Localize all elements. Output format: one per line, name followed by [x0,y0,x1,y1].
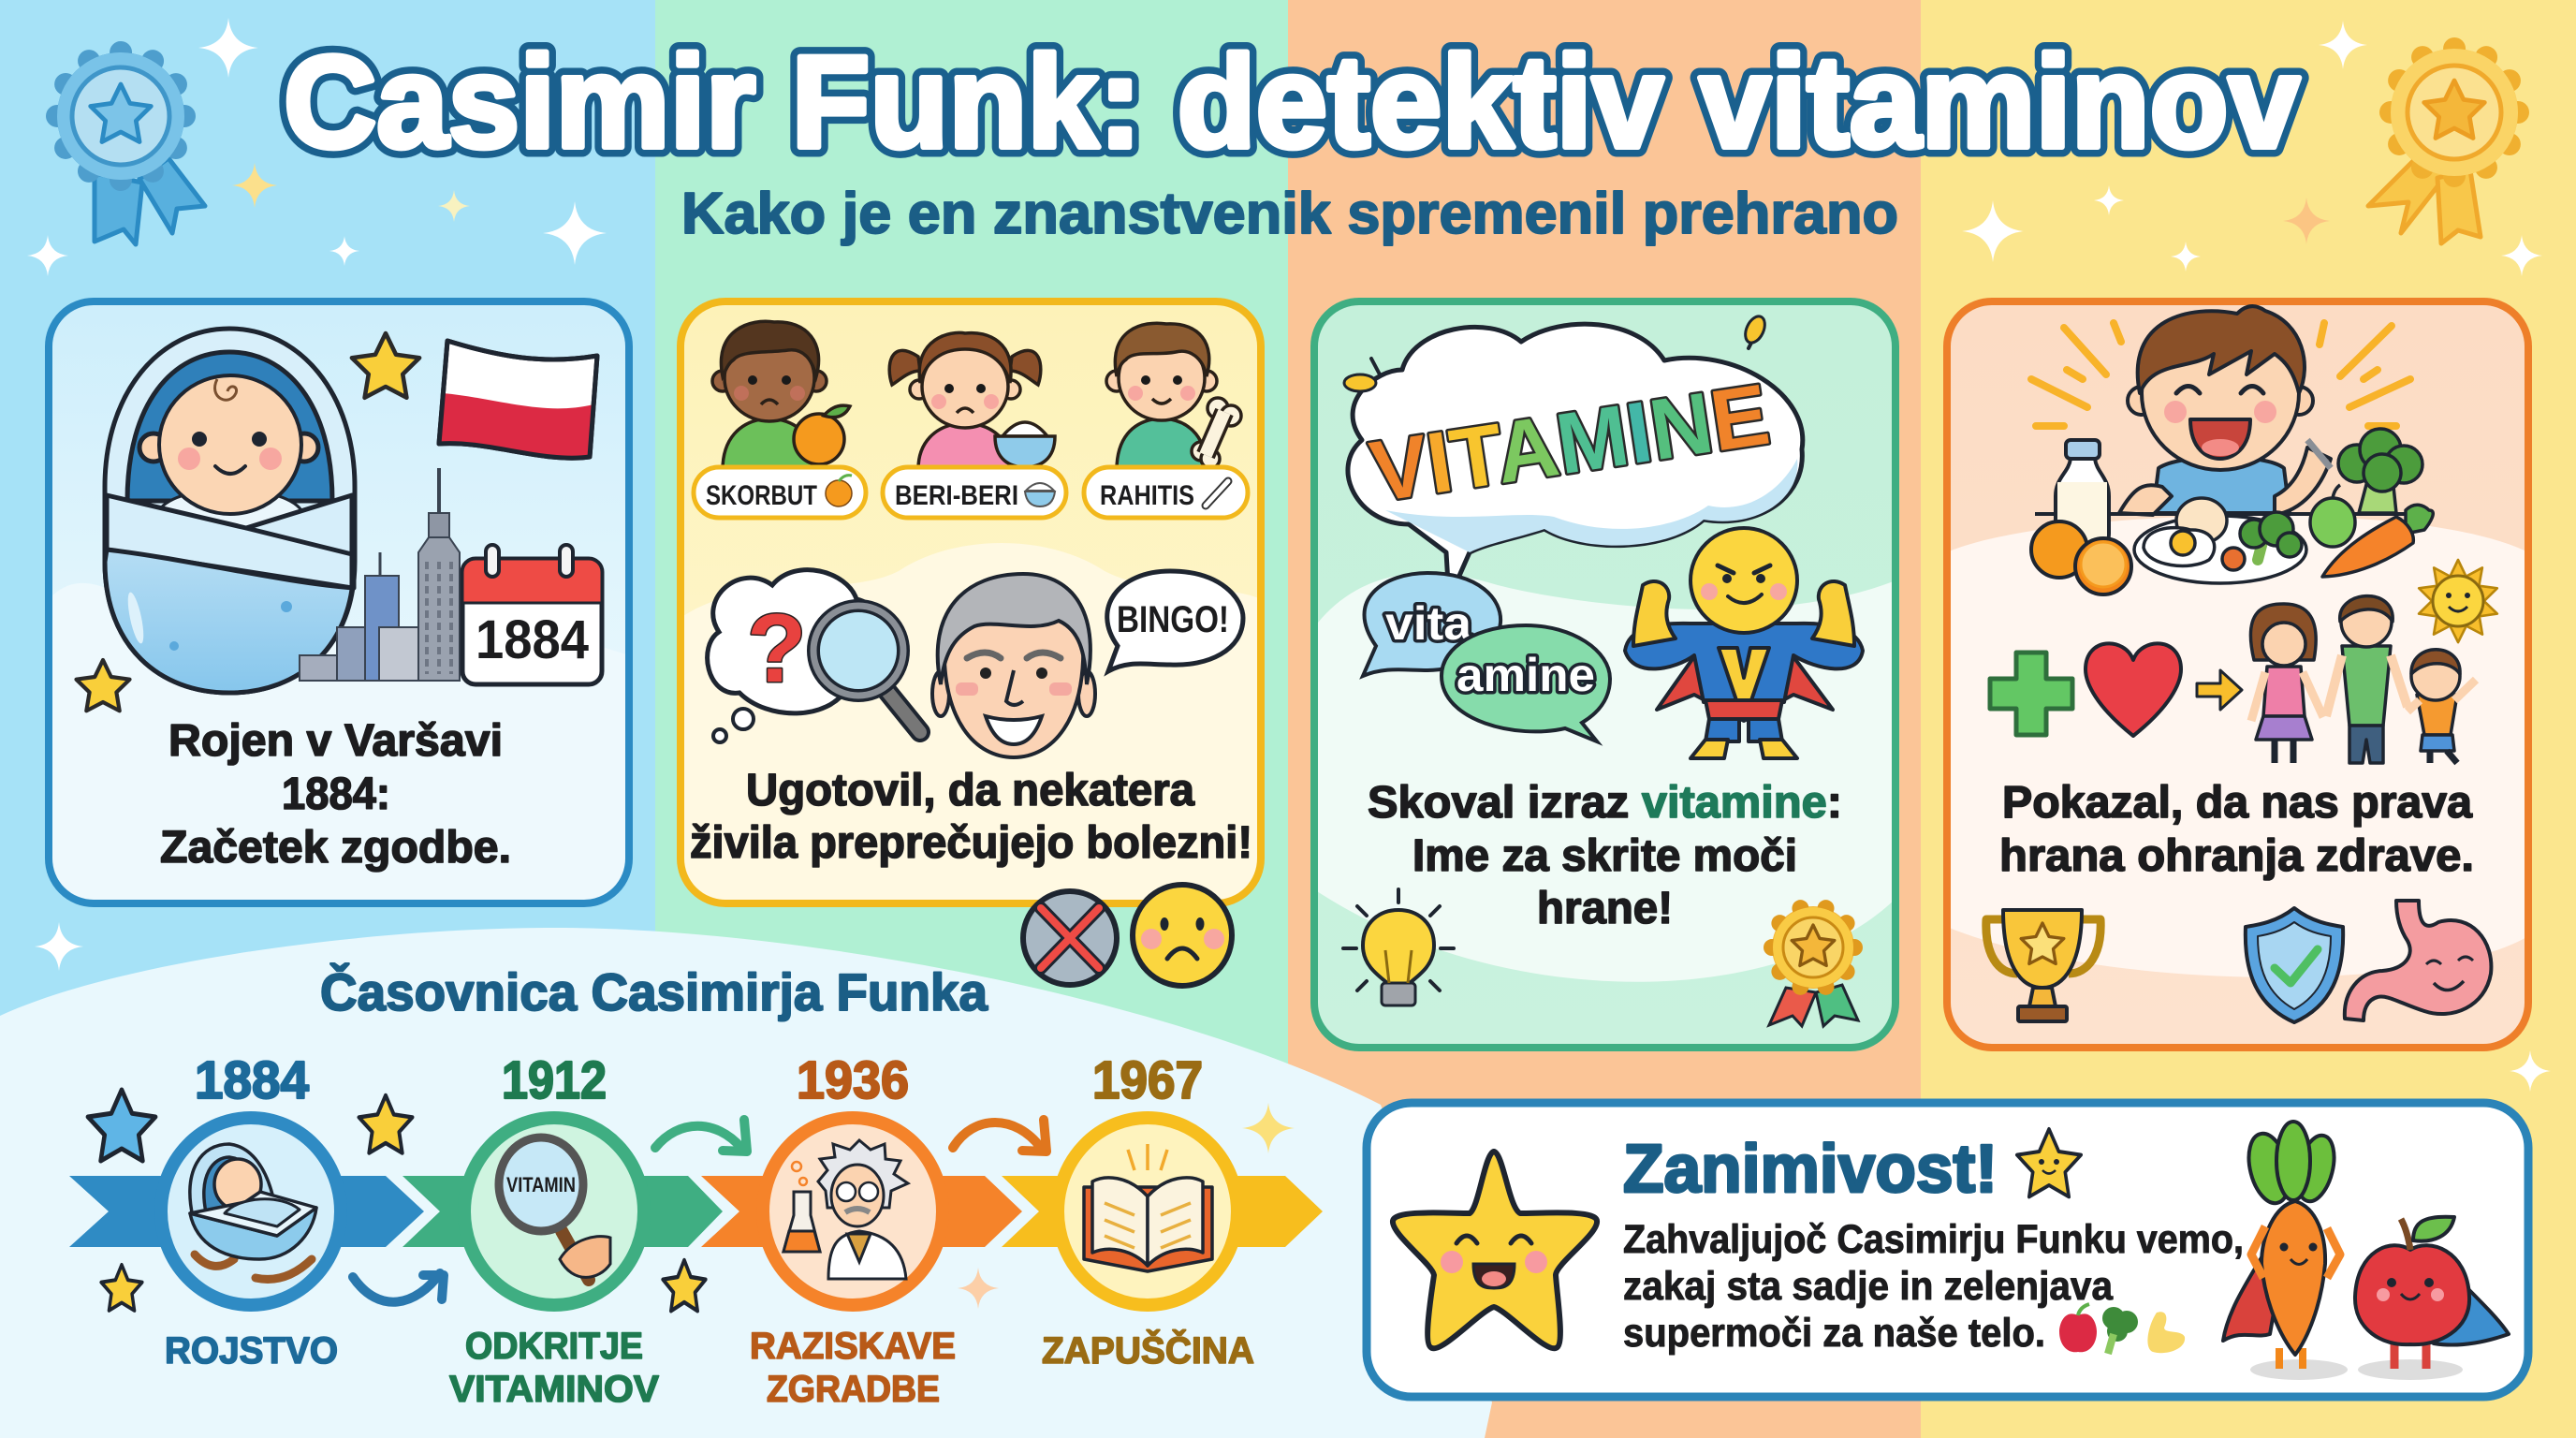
icon: swaddled baby [105,329,355,693]
text: fun fact body [1623,1217,2244,1356]
icon: blue rosette [57,52,205,244]
icon: shield [2246,908,2343,1022]
timeline [69,1050,1323,1410]
icon: green plus [1990,653,2072,735]
icon: child with rice [889,332,1055,469]
icon: plate with egg and broccoli [2134,498,2306,583]
text: discovery caption: živila preprečujejo bolezni! [690,818,1252,868]
bubble: vita [1363,573,1500,676]
label: RAHITIS: RAHITIS [1100,480,1194,511]
stage labels: ODKRITJE [465,1326,643,1367]
panel: coined the word vitamine [1314,301,1895,1048]
stage 1: birth [161,1118,341,1305]
panel: birth in Warsaw [49,301,629,906]
label: RAHITIS [1084,467,1248,518]
icon: Funk portrait [932,574,1095,757]
stage 4: legacy [1058,1118,1237,1305]
icon: calendar 1884: 1884 [476,609,589,670]
stage labels: RAZISKAVE [750,1326,956,1367]
year labels: 1884 [195,1050,309,1110]
text: discovery caption: Ugotovil, da nekatera [746,766,1194,815]
label: BERI-BERI [883,467,1066,518]
icon: scientist [783,1140,908,1279]
stage labels: ZGRADBE [767,1369,940,1410]
icon: carrot [2322,505,2433,577]
icon: family [2250,596,2476,763]
text: birth caption: Rojen v Varšavi [168,716,503,766]
stage 3: research [763,1118,943,1305]
icon: open book [1084,1144,1212,1271]
title: Casimir Funk: detektiv vitaminov [284,28,2300,175]
light backdrop [1947,515,2528,977]
icon: thought cloud with question mark: ? [747,594,807,703]
cloud: VITAMINE: VITAMINE [1365,367,1775,521]
year labels: 1912 [502,1050,607,1110]
icon: sun [2407,545,2514,651]
text: birth caption [160,716,511,873]
label: SKORBUT: SKORBUT [706,480,817,511]
text: birth caption: Začetek zgodbe. [160,823,511,873]
decorative sparks [1344,314,1768,391]
table line [2035,512,2434,516]
icon: thought cloud with question mark [708,570,884,742]
stage labels [165,1326,1254,1410]
icon: magnifier with VITAMIN [499,1137,610,1280]
icon: trophy [1986,910,2100,1021]
icon: medal [1769,906,1858,1026]
icon: magnifying glass [813,606,920,732]
icons: apple, broccoli, muscle [2059,1304,2185,1354]
icon: cradle [190,1144,316,1279]
icon: apple [2310,485,2355,547]
heading: Zanimivost: Zanimivost! [1623,1132,1998,1207]
cloud: VITAMINE [1348,324,1803,599]
icon: arrow to family [2197,670,2242,710]
icon: star [77,660,129,711]
text: fun fact body: supermoči za naše telo. [1623,1311,2045,1356]
stage labels: ROJSTVO [165,1330,338,1372]
cloud backdrop [52,583,625,668]
icon: calendar 1884 [462,545,602,684]
label: BERI-BERI: BERI-BERI [895,480,1018,511]
text: healthy food caption [1999,778,2474,881]
panel: healthy food [1947,301,2528,1048]
icon: Polish flag [439,341,597,458]
speech bubble: BINGO [1107,571,1243,671]
text: vitamine caption [1368,778,1842,933]
ribbon arrows [69,1176,1323,1247]
year labels: 1936 [797,1050,909,1110]
text: fun fact body: Zahvaljujoč Casimirju Funku vemo, [1623,1217,2244,1262]
icon: small star [2017,1129,2081,1196]
year labels [195,1050,1203,1110]
icon: apple superhero [2355,1217,2509,1380]
bubble: amine: amine [1456,649,1595,701]
stage labels: VITAMINOV [449,1369,659,1410]
text: discovery caption [690,766,1252,868]
stage 2: discovery [464,1118,644,1305]
icon: happy boy eating [2119,306,2331,515]
bubble: amine [1442,625,1610,741]
decorative rays [2031,323,2410,426]
stage labels: ZAPUŠČINA [1042,1328,1254,1372]
icon: broccoli [2338,429,2422,513]
icon: red heart [2086,643,2181,736]
icon: happy stomach [2345,901,2491,1020]
icon: star [352,333,419,398]
bubble: vita: vita [1385,597,1472,650]
text: vitamine caption: hrane! [1537,884,1673,933]
icon: vitamin superhero [1625,528,1863,758]
icon: Warsaw skyline [300,468,460,681]
year labels: 1967 [1092,1050,1203,1110]
icon: crossed-out food [1023,891,1117,985]
text: vitamine caption: Ime za skrite moči [1412,831,1797,881]
icon: magnifier with VITAMIN: VITAMIN [506,1173,576,1196]
icon: child with bone [1106,323,1241,470]
heading: timeline: Časovnica Casimirja Funka [320,962,988,1021]
arrows between stages [353,1120,1046,1302]
text: healthy food caption: Pokazal, da nas prava [2002,778,2472,828]
panel: fun fact [1367,1103,2528,1397]
panel: diseases and discovery [681,301,1261,906]
text: fun fact body: zakaj sta sadje in zelenjava [1623,1264,2114,1309]
text: birth caption: 1884: [282,770,390,819]
decorative sparkles [27,18,2551,1092]
subtitle: Kako je en znanstvenik spremenil prehrano [681,182,1898,246]
icon: oranges [2031,521,2131,594]
icon: child with orange [712,321,850,470]
cream backdrop [681,543,1261,906]
text: vitamine caption: Skoval izraz vitamine: [1368,778,1842,828]
icon: gold rosette [2368,49,2518,243]
icon: sad face [1133,885,1232,986]
timeline background wave [0,928,1492,1438]
stars and sparkles [88,1090,1295,1311]
label: SKORBUT [694,467,866,518]
light backdrop [1314,573,1895,982]
icon: light bulb [1343,889,1454,1005]
speech bubble: BINGO: BINGO! [1117,599,1229,640]
text: healthy food caption: hrana ohranja zdrave. [1999,831,2474,881]
icon: milk bottle [2056,440,2109,545]
icon: smiling star [1393,1152,1597,1348]
title: Casimir Funk: detektiv vitaminov [284,28,2300,175]
icon: carrot superhero [2223,1122,2348,1380]
